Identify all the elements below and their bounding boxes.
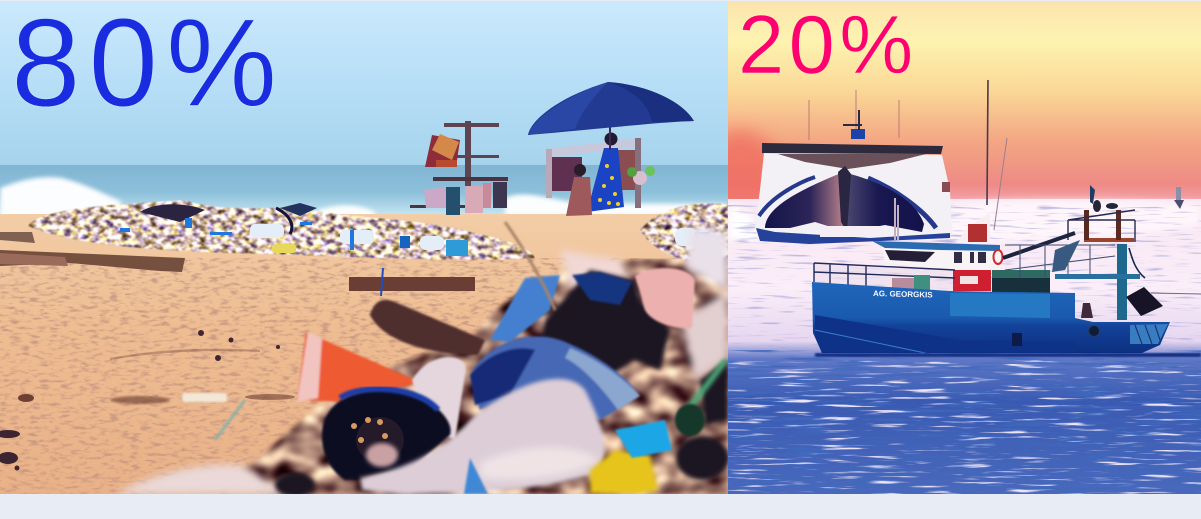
- yellow wrapper: [590, 450, 658, 494]
- large white plastic bag: [360, 379, 605, 494]
- breaking waves: [0, 174, 727, 214]
- waterline: [756, 228, 950, 244]
- clothes rack with bags: [410, 121, 508, 215]
- sky: [0, 1, 728, 166]
- dark tangled debris: [275, 270, 728, 497]
- foreground plastic trash pile: [115, 222, 728, 497]
- fishing boat: [812, 80, 1201, 354]
- blue hull stripes: [759, 177, 815, 216]
- twin bow tunnel: [765, 173, 847, 232]
- sand: [0, 214, 728, 495]
- sunset sky: [728, 1, 1201, 200]
- seagull in distance: [1174, 187, 1184, 209]
- textured debris base: [240, 259, 728, 494]
- boat name: AG. GEORGKIS: [873, 289, 933, 300]
- trawl gantry: [1003, 185, 1201, 320]
- pale bag by wheel: [412, 357, 465, 440]
- panel: polluted beach photo: [0, 1, 728, 497]
- white hull: [755, 153, 952, 240]
- twig: [505, 222, 555, 310]
- blue beach umbrella: [528, 82, 694, 150]
- brown plank: [370, 300, 485, 355]
- red cup: [297, 332, 420, 402]
- ferry masts: [809, 90, 899, 140]
- boat shadow on water: [815, 353, 1201, 357]
- green strip: [686, 356, 728, 406]
- pale blurred debris: [115, 225, 728, 494]
- bright horizon glare: [945, 200, 1201, 245]
- driftwood logs: [0, 232, 185, 272]
- distant water streaks: [728, 205, 1201, 355]
- wooden block: [349, 268, 475, 296]
- ferry side detail: [942, 182, 950, 192]
- water ripple texture: light: [728, 360, 1201, 495]
- fisherman: [1081, 303, 1093, 318]
- top deck: [762, 143, 943, 154]
- sand texture: [0, 258, 728, 495]
- sea: [728, 199, 1201, 495]
- blue hull: [812, 282, 1170, 353]
- sand marks and pebbles: [0, 330, 295, 470]
- red glow behind ferry: [728, 122, 776, 199]
- water ripple texture: dark: [728, 350, 1201, 495]
- pink container: [635, 268, 695, 328]
- cyan wrapper: [615, 420, 672, 458]
- blue bag: [470, 336, 640, 420]
- sea: [0, 165, 728, 215]
- deck railing and crates: [814, 263, 953, 292]
- ferry catamaran: [755, 90, 952, 244]
- black wheel: [322, 389, 451, 480]
- people under the umbrella: [566, 132, 624, 216]
- wheelhouse: [880, 242, 1001, 272]
- market stall frame with clothes: [546, 138, 655, 208]
- red cabin section: [953, 270, 991, 291]
- heading: 20%: 20%: [738, 0, 918, 91]
- panel: ships at sea photo: [700, 1, 1201, 495]
- distant trash line: [28, 200, 728, 268]
- blue shard: [464, 458, 488, 494]
- blue torn bag: [490, 275, 560, 342]
- radio masts: [987, 80, 988, 205]
- hanging net bag: [1126, 287, 1163, 316]
- bridge mast: [843, 110, 865, 139]
